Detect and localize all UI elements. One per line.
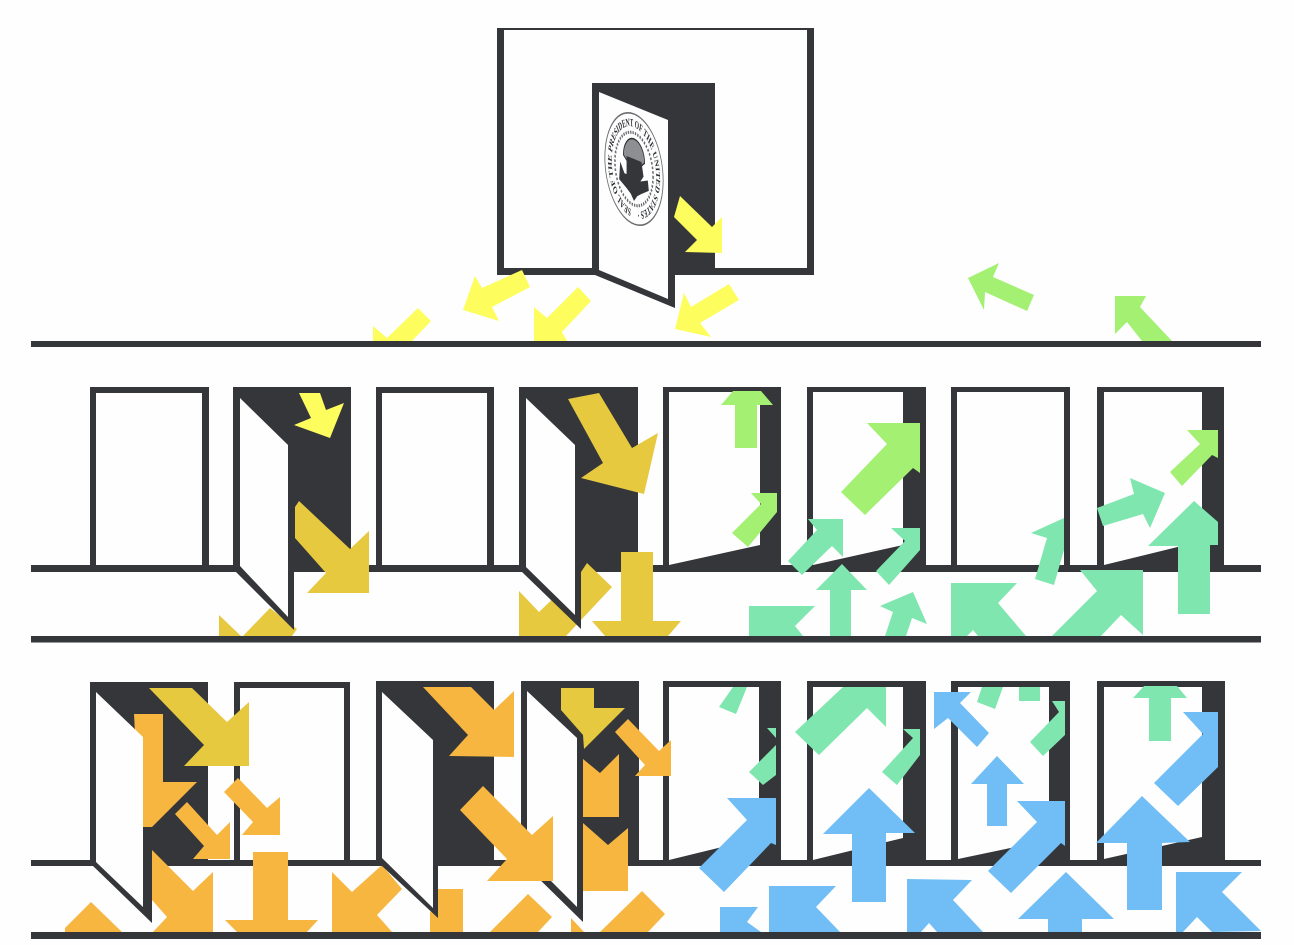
door: closed 7 — [951, 387, 1070, 570]
door: closed 2 — [234, 682, 350, 865]
arrows: yellow and gold outgoing — [294, 393, 681, 636]
arrows: mint incoming — [719, 686, 1187, 785]
door: open leaf 1 — [90, 692, 152, 923]
door: open frame 2 and 4 — [233, 387, 638, 572]
line: middle floor — [31, 636, 1261, 642]
panel: bottom row of doors — [31, 681, 1261, 932]
panel: middle row of doors — [31, 387, 1261, 636]
door: inward doors 5 6 7 8 — [663, 681, 1225, 866]
door: open leaf 4 — [521, 691, 583, 922]
icon: presidential seal on door: SEAL OF THE PRESIDENT OF THE UNITED STATES · — [608, 118, 660, 219]
door: open leaf 4 — [519, 398, 581, 629]
arrows behind open doors — [134, 714, 463, 932]
line: top floor — [31, 341, 1261, 347]
arrows: green appointees arriving — [968, 263, 1172, 341]
door: closed 1 — [90, 387, 209, 570]
arrows behind open doors — [219, 563, 612, 636]
arrows: mint incoming — [749, 478, 1218, 636]
arrows: orange outgoing — [65, 687, 671, 932]
door: open leaf 2 — [233, 398, 294, 630]
arrow: leaving through the door — [674, 196, 722, 253]
door: inward doors 5 6 8 — [663, 387, 1224, 572]
arrows: yellow appointees leaving — [373, 270, 739, 341]
door: open leaf 3 — [376, 692, 438, 918]
arrows: gold outgoing — [149, 688, 625, 766]
line: bottom floor — [31, 932, 1261, 939]
door: closed 3 — [376, 387, 494, 570]
door: open frames 1 3 4 — [90, 681, 639, 866]
arrows: blue incoming — [699, 692, 1261, 932]
arrows: light green incoming — [721, 391, 1218, 547]
panel: top presidential room — [497, 28, 814, 308]
